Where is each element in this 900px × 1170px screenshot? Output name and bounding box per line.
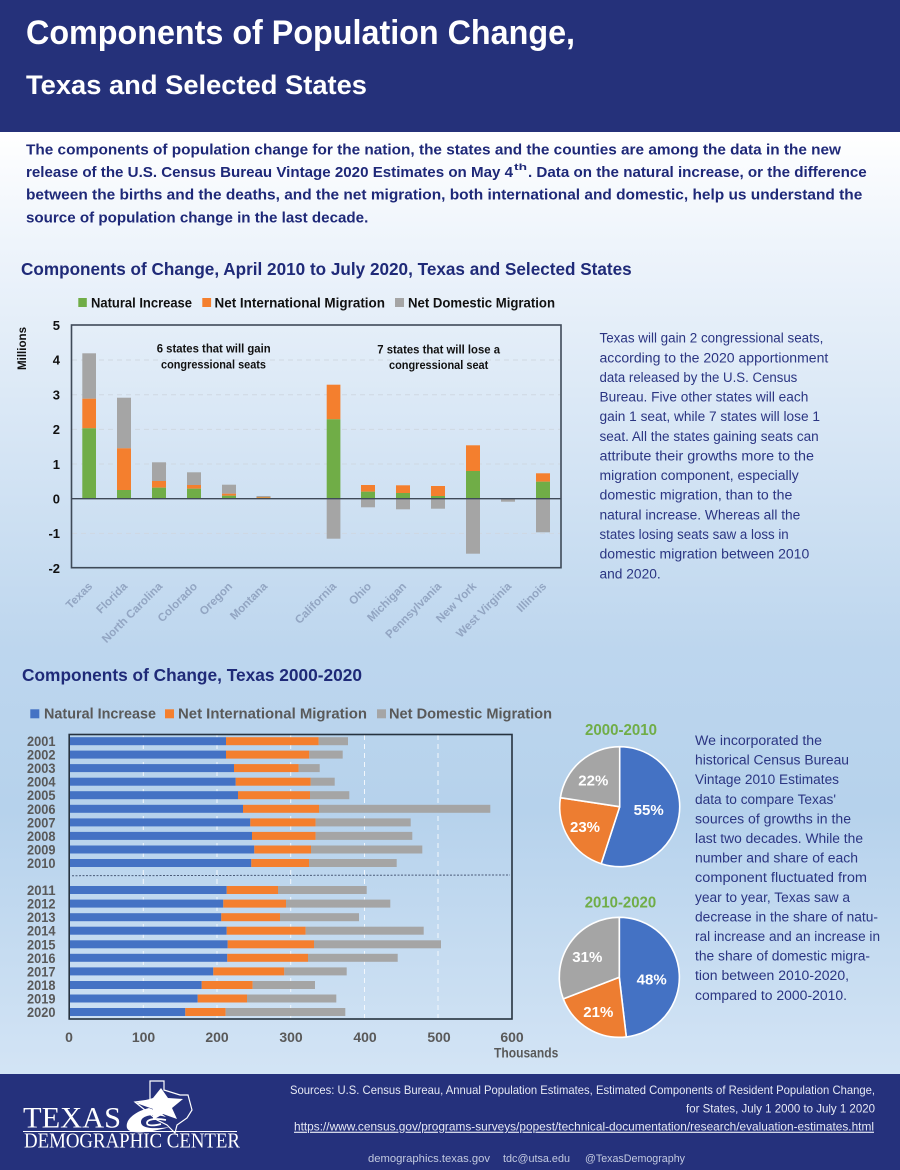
bars: natural increase	[70, 737, 254, 1016]
intro text block: between the births and the deaths, and the net migration, both international and domestic, help us understand the	[26, 187, 862, 204]
sources text: Sources: U.S. Census Bureau, Annual Population Estimates, Estimated Components of Resident Population Change,	[290, 1083, 875, 1097]
text block: historical comparison: historical Census Bureau	[695, 753, 849, 768]
pie title: 2010-2020	[585, 894, 656, 911]
x axis labels: 500	[427, 1029, 451, 1045]
y axis labels: -1	[48, 526, 60, 541]
intro text block: release of the U.S. Census Bureau Vintage 2020 Estimates on May 4	[26, 164, 514, 181]
footer band	[0, 1074, 900, 1170]
legend: chart 1: Net International Migration	[214, 294, 385, 310]
text block: historical comparison: We incorporated the	[695, 733, 822, 748]
title: Components of Population Change,	[26, 14, 575, 52]
year labels: 2015	[27, 936, 56, 952]
y axis labels: 1	[53, 457, 60, 472]
text block: historical comparison: ral increase and an increase in	[695, 929, 880, 944]
year labels: 2002	[27, 747, 56, 763]
bar: Pennsylvania	[431, 486, 445, 509]
legend: chart 1: Natural Increase	[91, 294, 192, 310]
intro text block: th	[514, 162, 527, 173]
legend: chart 2: Net International Migration	[178, 705, 367, 722]
axis title: Millions: Millions	[15, 327, 29, 370]
year labels: 2010	[27, 855, 56, 871]
text block: congressional seats: according to the 2020 apportionment	[600, 350, 829, 365]
pie chart: 2010-2020: 31%	[572, 949, 602, 966]
year labels: 2006	[27, 801, 56, 817]
bar: Montana	[256, 496, 270, 499]
x axis state labels: West Virginia	[454, 580, 515, 640]
contact line: @TexasDemography	[585, 1153, 685, 1165]
pie chart: 2010-2020	[559, 894, 679, 1037]
y axis labels: 3	[53, 387, 60, 402]
bar: West Virginia	[501, 498, 515, 502]
logo: Texas Demographic Center: DEMOGRAPHIC CENTER	[24, 1129, 240, 1153]
logo: Texas Demographic Center	[23, 1081, 240, 1153]
x axis state labels: New York	[434, 580, 480, 625]
year labels: 2018	[27, 977, 56, 993]
x axis state labels: Ohio	[347, 581, 374, 608]
text block: historical comparison: last two decades. While the	[695, 831, 863, 846]
bar: Oregon	[222, 485, 236, 499]
x axis labels	[65, 1029, 524, 1045]
bar: Illinois	[536, 473, 550, 532]
heading: chart 1: Components of Change, April 2010 to July 2020, Texas and Selected States	[21, 259, 632, 279]
x axis labels: 100	[132, 1029, 155, 1045]
text block: congressional seats: Texas will gain 2 congressional seats,	[600, 331, 823, 346]
pie chart: 2010-2020: 48%	[637, 971, 667, 988]
text block: historical comparison: Vintage 2010 Estimates	[695, 772, 839, 787]
text block: historical comparison: compared to 2000-2010.	[695, 988, 847, 1003]
bar: North Carolina	[152, 462, 166, 499]
x axis state labels: Texas	[64, 581, 95, 612]
plot frame	[72, 325, 561, 568]
bar: Ohio	[361, 485, 375, 507]
year labels: 2003	[27, 760, 56, 776]
y axis labels	[48, 318, 61, 576]
text block: congressional seats: states losing seats saw a loss in	[600, 527, 789, 542]
y axis labels: 2	[53, 422, 60, 437]
year labels: 2017	[27, 963, 56, 979]
y axis labels: 4	[53, 353, 61, 368]
legend: chart 2: Natural Increase	[44, 705, 156, 722]
y axis labels: 0	[53, 492, 60, 506]
legend: chart 1: Net Domestic Migration	[408, 294, 555, 310]
year labels	[27, 733, 56, 1020]
axis title: Thousands: Thousands	[494, 1045, 558, 1061]
text block: historical comparison: the share of domestic migra-	[695, 949, 870, 964]
bars: net international migration	[185, 737, 319, 1016]
sources text: https://www.census.gov/programs-surveys/popest/technical-documentation/research/evaluation-estimates.html	[294, 1120, 874, 1134]
annotation: gaining states: congressional seats	[161, 357, 266, 371]
text block: historical comparison	[695, 733, 880, 1003]
year labels: 2016	[27, 950, 56, 966]
header banner	[0, 0, 900, 132]
x axis labels: 600	[500, 1029, 524, 1045]
pie chart: 2000-2010: 22%	[578, 773, 608, 790]
annotation: gaining states: 6 states that will gain	[157, 342, 271, 356]
text block: historical comparison: sources of growths in the	[695, 811, 851, 826]
year labels: 2007	[27, 814, 56, 830]
x axis state labels: Oregon	[198, 581, 235, 618]
text block: congressional seats: domestic migration between 2010	[600, 547, 809, 562]
y axis labels: -2	[48, 561, 60, 576]
x axis labels: 0	[65, 1029, 73, 1045]
contact line: tdc@utsa.edu	[503, 1153, 570, 1165]
x axis state labels: Montana	[228, 580, 271, 623]
bar: California	[327, 385, 340, 539]
legend: chart 2: Net Domestic Migration	[389, 705, 552, 722]
text block: congressional seats: Bureau. Five other states will each	[600, 390, 808, 405]
text block: historical comparison: tion between 2010-2020,	[695, 968, 849, 983]
pie title: 2000-2010	[585, 722, 657, 739]
text block: congressional seats: attribute their growths more to the	[600, 448, 814, 464]
year labels: 2020	[27, 1004, 56, 1020]
pie chart: 2010-2020: 21%	[583, 1004, 613, 1021]
text block: historical comparison: number and share of each	[695, 851, 858, 866]
bar: Texas	[82, 353, 96, 499]
year labels: 2014	[27, 923, 56, 939]
year labels: 2019	[27, 990, 56, 1006]
annotation: losing states: congressional seat	[389, 358, 488, 372]
logo: Texas Demographic Center: TEXAS	[23, 1101, 121, 1134]
text block: congressional seats: gain 1 seat, while 7 states will lose 1	[600, 409, 820, 424]
sources text: for States, July 1 2000 to July 1 2020	[686, 1102, 875, 1116]
intro text block: The components of population change for the nation, the states and the counties are among the data in the new	[26, 141, 841, 158]
legend: chart 2	[30, 705, 552, 722]
text block: congressional seats: domestic migration, than to the	[600, 488, 792, 503]
text block: congressional seats: seat. All the states gaining seats can	[600, 429, 819, 444]
x axis labels: 400	[353, 1029, 377, 1045]
intro text block: . Data on the natural increase, or the difference	[528, 164, 867, 181]
plot frame	[69, 734, 512, 1019]
x axis state labels	[64, 580, 549, 646]
intro text block	[26, 141, 867, 227]
text block: historical comparison: decrease in the share of natu-	[695, 909, 878, 924]
heading: chart 2: Components of Change, Texas 2000-2020	[22, 665, 362, 685]
x axis state labels: Illinois	[515, 581, 549, 615]
annotation: gaining states	[157, 342, 271, 371]
intro text block: source of population change in the last decade.	[26, 210, 368, 227]
year labels: 2012	[27, 896, 56, 912]
bar: Florida	[117, 398, 131, 499]
pie chart: 2000-2010: 23%	[570, 819, 600, 836]
year labels: 2009	[27, 842, 56, 858]
x axis state labels: North Carolina	[100, 580, 166, 646]
text block: congressional seats: and 2020.	[600, 566, 661, 581]
x axis labels: 200	[205, 1029, 229, 1045]
pie chart: 2000-2010: 55%	[634, 802, 664, 819]
year labels: 2005	[27, 787, 56, 803]
text block: congressional seats: data released by the U.S. Census	[600, 370, 798, 385]
x axis labels: 300	[279, 1029, 303, 1045]
bar: New York	[466, 445, 480, 554]
x axis state labels: Colorado	[156, 581, 200, 625]
pie chart: 2000-2010	[560, 722, 680, 867]
title	[26, 14, 575, 100]
year labels: 2011	[27, 882, 56, 898]
x axis state labels: Florida	[95, 580, 131, 616]
year labels: 2013	[27, 909, 56, 925]
x axis state labels: California	[293, 580, 340, 627]
x axis state labels: Pennsylvania	[384, 580, 445, 641]
chart: components of change by state	[15, 318, 561, 646]
x axis state labels: Michigan	[365, 581, 409, 624]
text block: historical comparison: data to compare Texas'	[695, 792, 836, 807]
text block: congressional seats	[600, 331, 829, 581]
bars: net domestic migration	[226, 737, 490, 1016]
chart: Texas components 2001-2020	[27, 733, 558, 1061]
year labels: 2001	[27, 733, 56, 749]
year labels: 2008	[27, 828, 56, 844]
bar: Colorado	[187, 472, 201, 499]
sources text	[290, 1083, 875, 1134]
legend: chart 1	[78, 294, 555, 310]
bar: Michigan	[396, 485, 410, 509]
icon: Texas outline with star and swoosh	[127, 1081, 192, 1133]
text block: historical comparison: year to year, Texas saw a	[695, 890, 850, 905]
annotation: losing states	[377, 342, 500, 372]
title: Texas and Selected States	[26, 70, 367, 100]
contact line	[368, 1153, 685, 1165]
y axis labels: 5	[53, 318, 60, 333]
contact line: demographics.texas.gov	[368, 1153, 491, 1165]
text block: congressional seats: natural increase. Whereas all the	[600, 507, 800, 522]
text block: historical comparison: component fluctuated from	[695, 870, 867, 885]
annotation: losing states: 7 states that will lose a	[377, 342, 500, 356]
text block: congressional seats: migration component, especially	[600, 468, 799, 483]
year labels: 2004	[27, 774, 56, 790]
